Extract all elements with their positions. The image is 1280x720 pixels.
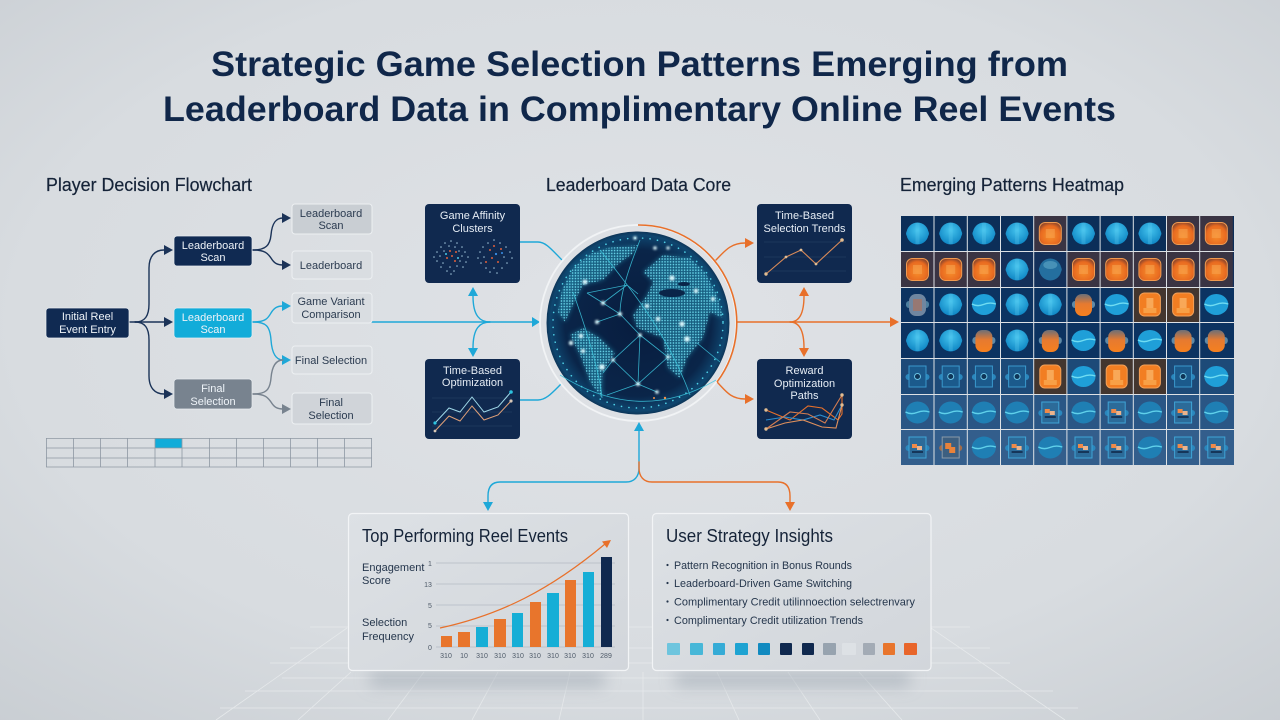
line series — [766, 395, 842, 429]
bar chart — [424, 540, 615, 660]
bar chart: 10 — [460, 653, 468, 660]
node: leaderboard scan cyan: Scan — [200, 324, 226, 336]
heatmap — [901, 216, 1234, 465]
title — [163, 45, 1116, 129]
panel: reward optimization paths: Optimization — [774, 378, 835, 390]
bullet list — [666, 560, 915, 627]
outcome: final selection 2: Final — [319, 397, 343, 409]
network nodes — [569, 236, 715, 394]
line series — [764, 238, 844, 276]
panel: reward optimization paths: Reward — [786, 365, 823, 377]
heatmap row 4 — [906, 330, 1228, 352]
panel heading: Top Performing Reel Events — [362, 526, 568, 546]
node: leaderboard scan navy: Scan — [200, 252, 226, 264]
orange nodes — [653, 397, 666, 399]
bar chart: 310 — [564, 653, 576, 660]
bullet list: Pattern Recognition in Bonus Rounds — [674, 560, 852, 572]
inland sea — [659, 282, 690, 297]
node: initial reel event entry: Event Entry — [59, 324, 116, 336]
axis label: engagement score: Engagement — [362, 562, 424, 574]
heatmap row 1 — [906, 216, 1233, 251]
axis label: selection frequency: Selection — [362, 617, 407, 629]
node: leaderboard scan cyan: Leaderboard — [182, 312, 244, 324]
floor grid — [216, 627, 1078, 720]
heading: emerging patterns heatmap: Emerging Patterns Heatmap — [900, 175, 1124, 195]
outcome: leaderboard — [292, 251, 372, 279]
cluster scatter right — [477, 239, 513, 274]
outcome: final selection 2: Selection — [308, 410, 354, 422]
bullet list: Complimentary Credit utilization Trends — [674, 615, 863, 627]
title: Leaderboard Data in Complimentary Online Reel Events — [163, 90, 1116, 129]
outcome: leaderboard scan: Scan — [318, 220, 344, 232]
panel: user strategy insights — [652, 514, 931, 670]
panel: game affinity clusters: Clusters — [452, 223, 493, 235]
axis label: engagement score — [362, 562, 424, 587]
panel: reward optimization paths — [757, 359, 852, 439]
bar chart: 289 — [600, 653, 612, 660]
title: Strategic Game Selection Patterns Emerging from — [211, 45, 1068, 84]
outcome: leaderboard scan — [292, 204, 372, 234]
bar chart: 0 — [428, 645, 432, 652]
colour swatches — [667, 643, 917, 655]
panel: time-based optimization — [425, 359, 520, 439]
outcome: leaderboard scan: Leaderboard — [300, 208, 362, 220]
bar chart: 310 — [529, 653, 541, 660]
heatmap row 2 — [901, 252, 1233, 287]
outcome: leaderboard: Leaderboard — [300, 260, 362, 272]
bar chart: 13 — [424, 582, 432, 589]
heatmap row 6 — [906, 402, 1228, 424]
line series — [435, 392, 511, 431]
panel: game affinity clusters — [425, 204, 520, 283]
axis label: engagement score: Score — [362, 575, 391, 587]
outcome: game variant comparison — [292, 293, 372, 323]
node: leaderboard scan navy: Leaderboard — [182, 240, 244, 252]
bar chart: 310 — [582, 653, 594, 660]
continents — [558, 245, 723, 398]
continent glow — [558, 245, 723, 398]
node: leaderboard scan cyan — [174, 308, 252, 338]
core connectors — [468, 238, 899, 404]
outcome: final selection 2 — [292, 393, 372, 424]
heatmap row 7 — [906, 436, 1228, 458]
panel: time-based selection trends — [757, 204, 852, 283]
panel: top performing reel events — [348, 514, 628, 670]
bar chart: 310 — [512, 653, 524, 660]
table strip — [46, 438, 372, 467]
flow connectors — [130, 213, 532, 414]
perimeter dots — [553, 238, 723, 408]
heading: player decision flowchart: Player Decision Flowchart — [46, 175, 252, 195]
node: final selection grey: Selection — [190, 396, 236, 408]
heatmap row 3 — [906, 287, 1228, 322]
bottom connectors — [483, 422, 795, 511]
node: leaderboard scan navy — [174, 236, 252, 266]
panel: reward optimization paths: Paths — [790, 390, 819, 402]
bar chart: 5 — [428, 603, 432, 610]
trend arrow — [440, 540, 611, 628]
panel: time-based selection trends: Time-Based — [775, 210, 834, 222]
outcome: final selection: Final Selection — [295, 355, 367, 367]
panel shadows — [370, 672, 910, 686]
node: final selection grey — [174, 379, 252, 409]
node: initial reel event entry — [46, 308, 129, 338]
bar chart: 310 — [440, 653, 452, 660]
flowchart — [46, 204, 532, 424]
cluster scatter left — [433, 240, 469, 275]
globe rings — [540, 225, 737, 421]
outcome: final selection — [292, 346, 372, 374]
node: initial reel event entry: Initial Reel — [62, 311, 113, 323]
panel: game affinity clusters: Game Affinity — [440, 210, 506, 222]
axis label: selection frequency — [362, 617, 414, 643]
panel heading: User Strategy Insights — [666, 526, 833, 546]
bullet list: Complimentary Credit utilinnoection selectrenvary — [674, 596, 915, 608]
panel: time-based optimization: Optimization — [442, 377, 503, 389]
globe — [540, 225, 737, 421]
panel: time-based optimization: Time-Based — [443, 365, 502, 377]
outcome: game variant comparison: Game Variant — [297, 296, 365, 308]
axis label: selection frequency: Frequency — [362, 631, 414, 643]
bar chart: 1 — [428, 561, 432, 568]
heatmap row 5 — [906, 359, 1228, 394]
bar chart: 5 — [428, 623, 432, 630]
bar chart: 310 — [494, 653, 506, 660]
network lines — [560, 240, 720, 401]
panel: time-based selection trends: Selection Trends — [764, 223, 846, 235]
bar chart: 310 — [476, 653, 488, 660]
node: final selection grey: Final — [201, 383, 225, 395]
heading: leaderboard data core: Leaderboard Data Core — [546, 175, 731, 195]
outcome: game variant comparison: Comparison — [301, 309, 361, 321]
bullet list: Leaderboard-Driven Game Switching — [674, 578, 852, 590]
bar chart: 310 — [547, 653, 559, 660]
